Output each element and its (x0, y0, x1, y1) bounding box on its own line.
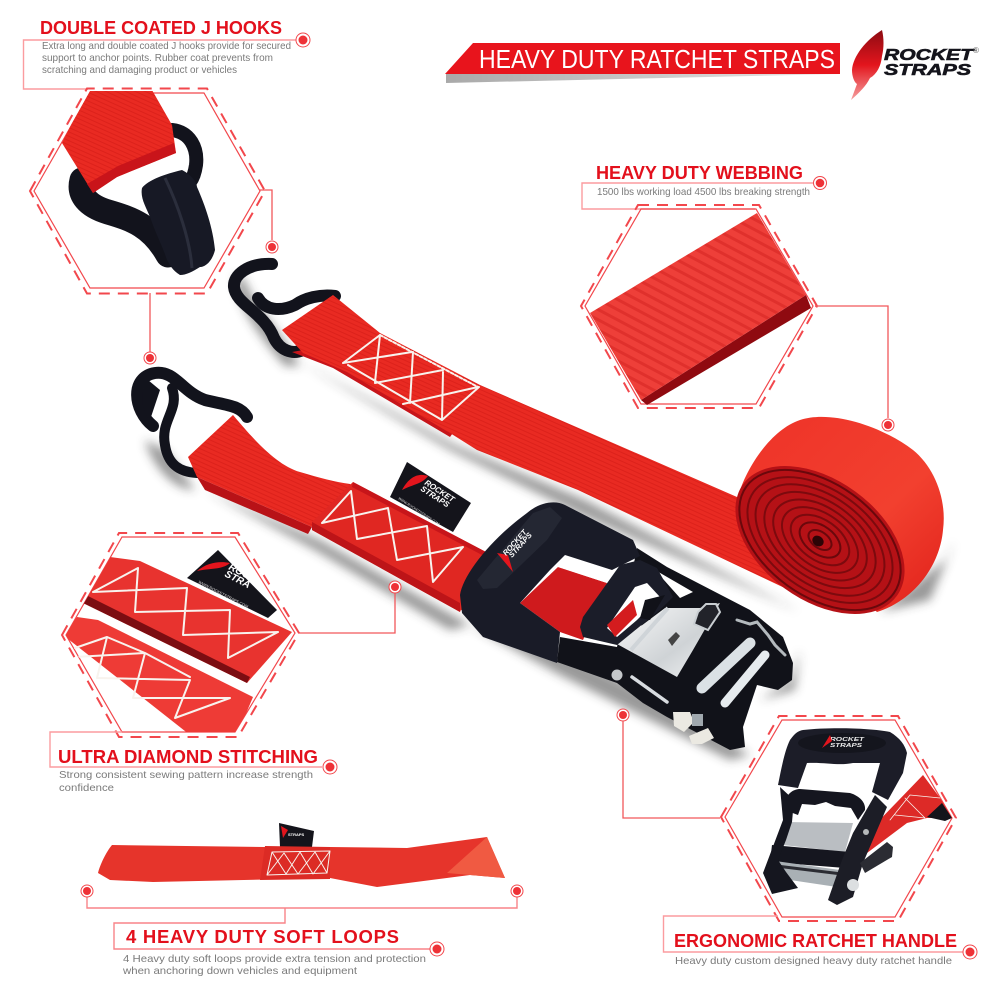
handle logo panel: STRAPS (507, 531, 534, 559)
handle logo panel: ROCKET (501, 527, 530, 557)
description: webbing: 1500 lbs working load 4500 lbs breaking strength (597, 187, 810, 198)
description: J hooks (42, 41, 291, 76)
hexagon: J hook close-up (30, 88, 265, 294)
description: stitching (59, 770, 313, 794)
inner lever (786, 789, 865, 820)
loop tag (279, 823, 314, 847)
heading: ergonomic ratchet handle: ERGONOMIC RATCHET HANDLE (674, 930, 957, 951)
panel: double coated J hooks text (24, 17, 310, 89)
hexagon: stitching close-up: STRA (223, 569, 252, 591)
steel plate and rollers (783, 822, 853, 852)
soft loop product (98, 823, 505, 887)
description: stitching: confidence (59, 783, 114, 794)
product shadow (145, 275, 955, 760)
connector: webbing to roll (815, 306, 894, 431)
steel rollers (632, 620, 785, 703)
description: stitching: Strong consistent sewing pattern increase strength (59, 770, 313, 781)
roll spiral face (708, 436, 932, 644)
logo: Rocket Straps: ROCKET (884, 47, 975, 64)
connector: J hook right (260, 190, 278, 253)
handle grip (460, 502, 640, 663)
wing nut (612, 670, 714, 744)
hexagon: stitching close-up: WWW.ROCKETSTRAPS.COM (198, 579, 249, 609)
panel: ultra diamond stitching text (50, 732, 337, 794)
description: J hooks: support to anchor points. Rubber coat prevents from (42, 53, 273, 64)
description: soft loops (122, 954, 426, 977)
panel: heavy duty webbing text (582, 162, 826, 209)
hexagon: ratchet handle close-up: STRAPS (830, 743, 863, 749)
banner title: HEAVY DUTY RATCHET STRAPS (479, 46, 835, 74)
logo: Rocket Straps: ® (973, 46, 979, 55)
woven label tag: STRAPS (419, 484, 452, 510)
description: soft loops: when anchoring down vehicles and equipment (122, 966, 357, 977)
lower strap (188, 415, 492, 616)
upper stitching (343, 335, 479, 420)
heading: double coated J hooks: DOUBLE COATED J HOOKS (40, 17, 282, 38)
main handle grip (778, 728, 907, 800)
ratchet body (557, 548, 793, 750)
loop tag: STRAPS (288, 832, 305, 837)
white gaps (620, 623, 650, 652)
heading: ultra diamond stitching: ULTRA DIAMOND STITCHING (58, 746, 318, 767)
woven label tag (390, 462, 471, 532)
steel plate (617, 603, 720, 677)
header banner (445, 43, 840, 83)
panel: soft loops text (122, 926, 426, 977)
ratchet mechanism (460, 502, 793, 750)
hexagon: stitching close-up (62, 533, 299, 737)
description: soft loops: 4 Heavy duty soft loops provide extra tension and protection (123, 954, 426, 965)
J hook: upper (234, 264, 335, 352)
lower stitching (322, 491, 463, 582)
handle logo panel (477, 507, 562, 589)
strap in hexagon (867, 775, 952, 853)
logo: Rocket Straps: STRAPS (884, 62, 972, 79)
strap through handle (520, 567, 607, 640)
hexagon: stitching close-up: ROCK (227, 562, 259, 585)
hexagon: webbing close-up (581, 205, 817, 408)
strap roll (708, 417, 944, 644)
connector: stitching to strap (298, 581, 401, 633)
rails (763, 787, 798, 894)
connector: J hook bottom (144, 293, 156, 364)
release lever (580, 560, 673, 645)
lower sleeve (312, 482, 486, 612)
heading: soft loops: 4 HEAVY DUTY SOFT LOOPS (126, 926, 399, 947)
connector: soft loop bracket (81, 885, 523, 956)
J hook: lower (137, 373, 247, 473)
description: ratchet handle: Heavy duty custom designed heavy duty ratchet handle (675, 956, 952, 967)
description: J hooks: scratching and damaging product or vehicles (42, 65, 237, 76)
upper strap (282, 295, 810, 600)
sleeve flap shadow edge (292, 350, 455, 437)
heading: heavy duty webbing: HEAVY DUTY WEBBING (596, 162, 803, 183)
woven label tag: WWW.ROCKETSTRAPS.COM (397, 496, 440, 526)
hexagon: ratchet handle close-up: ROCKET (830, 737, 865, 743)
description: J hooks: Extra long and double coated J hooks provide for secured (42, 41, 291, 52)
woven label tag: ROCKET (423, 478, 457, 505)
logo: Rocket Straps (851, 30, 979, 100)
panel: ergonomic ratchet handle text (664, 916, 977, 967)
hexagon: ratchet handle close-up (721, 716, 956, 921)
connector: ratchet handle (617, 709, 720, 818)
